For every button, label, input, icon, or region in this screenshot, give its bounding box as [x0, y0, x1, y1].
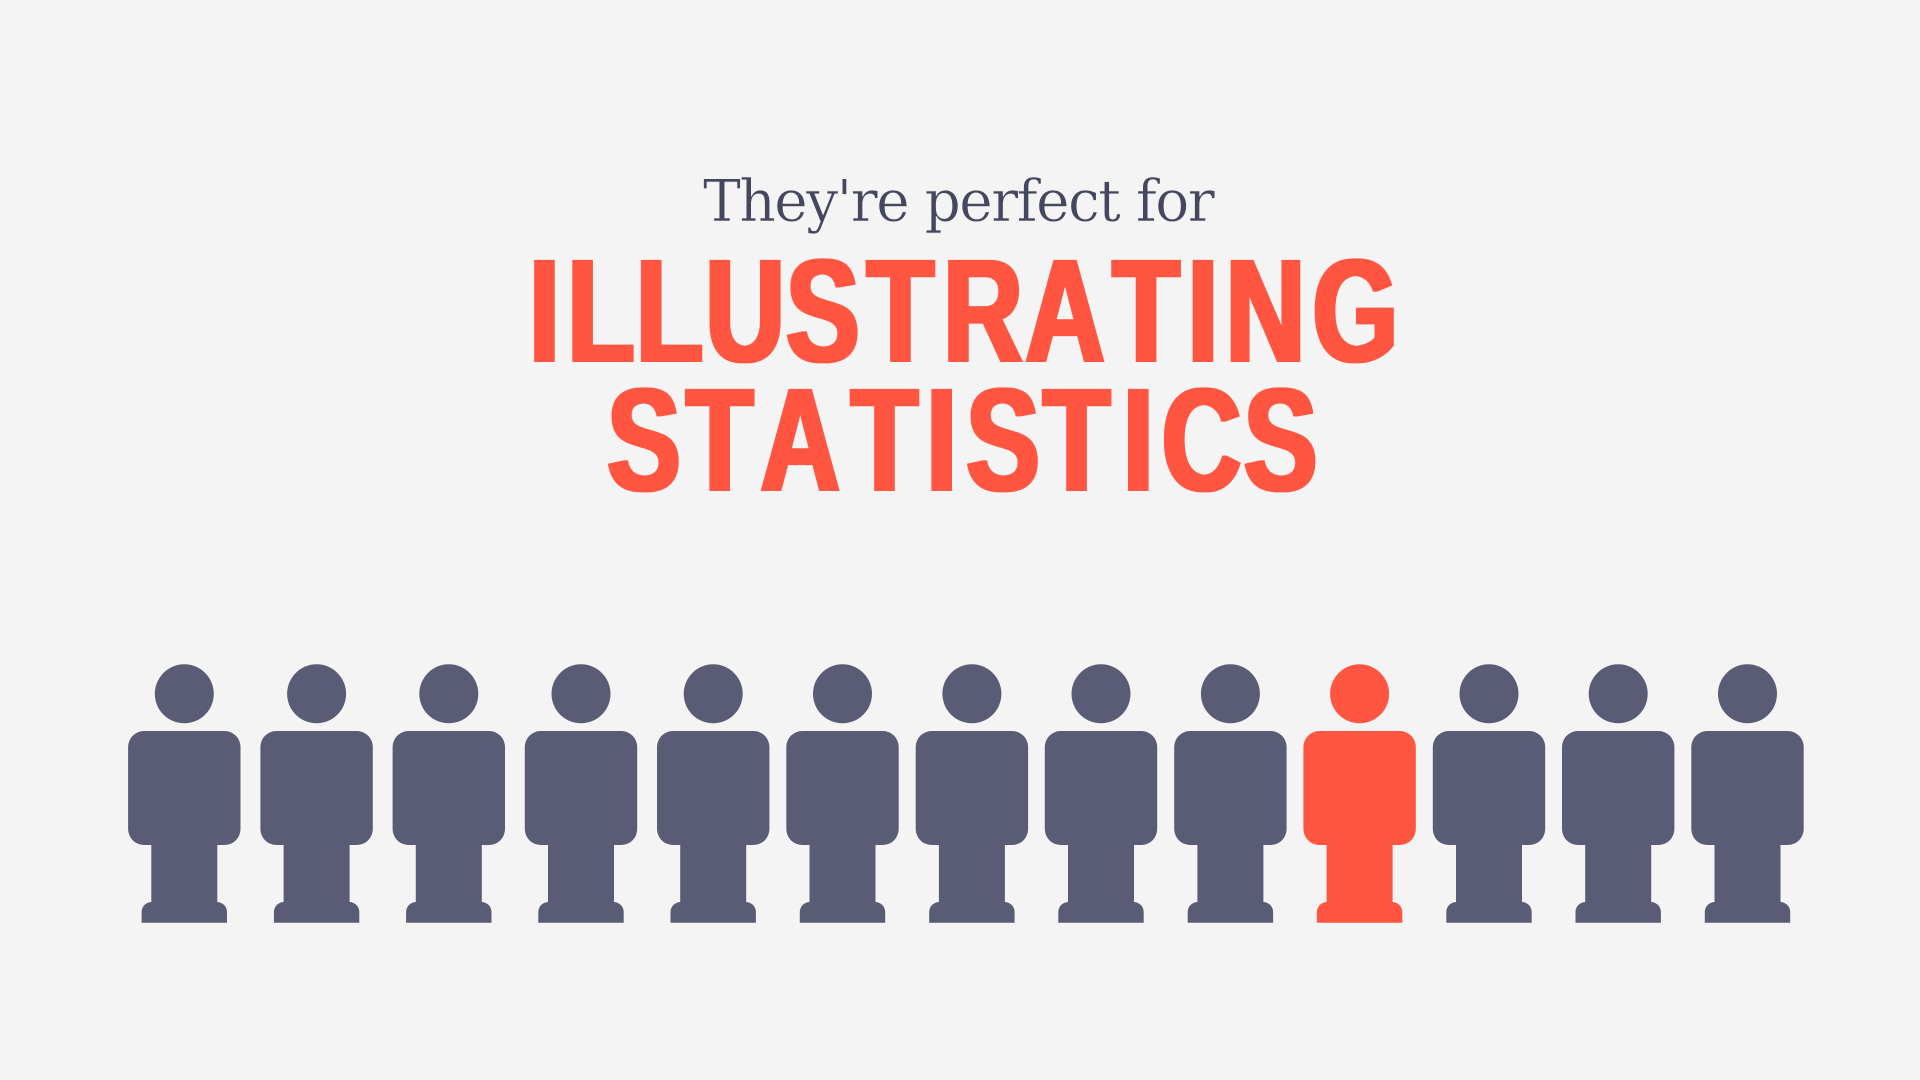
person icon 11	[1433, 664, 1545, 923]
person icon 12	[1562, 664, 1674, 923]
person icon 5	[657, 664, 769, 923]
person icon 4	[525, 664, 637, 923]
person icon 9	[1174, 664, 1287, 923]
title line 1: ILLUSTRATING	[529, 230, 1398, 394]
person icon 6	[786, 664, 899, 923]
person icon 8	[1045, 664, 1157, 923]
person icon 7	[916, 664, 1028, 923]
title line 2: STATISTICS	[607, 358, 1317, 522]
subtitle: They're perfect for	[703, 167, 1215, 235]
row of thirteen person icons	[128, 664, 1804, 923]
person icon 1	[128, 664, 241, 923]
person icon 2	[260, 664, 373, 923]
person icon 10: highlighted	[1303, 664, 1416, 923]
person icon 13	[1691, 664, 1804, 923]
person icon 3	[393, 664, 505, 923]
